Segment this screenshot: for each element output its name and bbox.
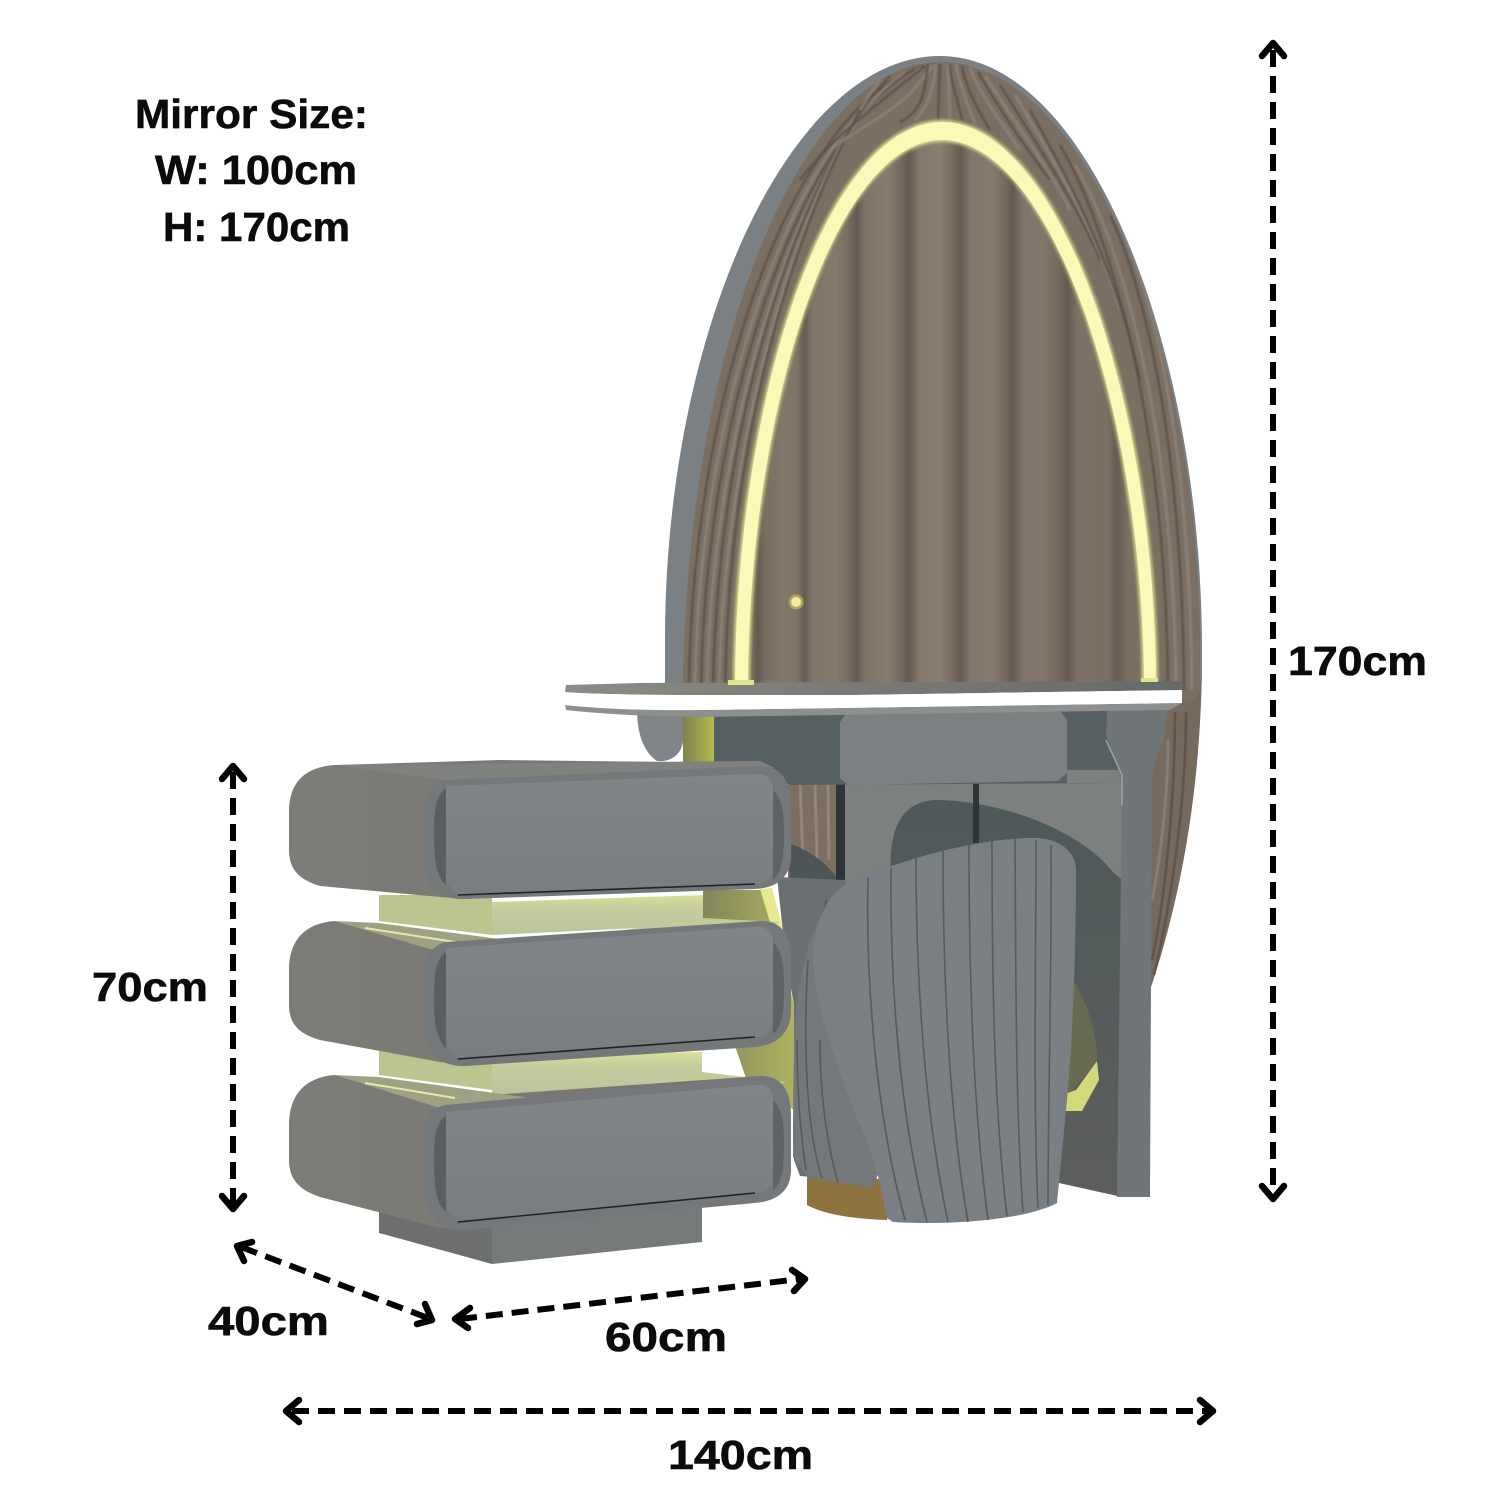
chair cast shadow and lower panel xyxy=(891,800,1122,1197)
right leg xyxy=(1106,708,1167,1197)
chair pleats xyxy=(868,839,1051,1222)
table underside xyxy=(565,703,1182,717)
curtain reflection xyxy=(683,62,1200,708)
plinth xyxy=(379,1200,702,1264)
chair xyxy=(793,838,1076,1223)
shadow beside drawer xyxy=(788,843,842,885)
nightstand xyxy=(289,760,791,1264)
mirror size text: Mirror Size: xyxy=(135,91,368,137)
rear shell pleats xyxy=(797,900,850,1183)
arrow: depth 40cm xyxy=(237,1242,432,1324)
mirror size text xyxy=(135,91,368,250)
gold base xyxy=(807,1172,890,1220)
arrow: nightstand height 70cm xyxy=(222,766,244,1209)
mirror size text: W: 100cm xyxy=(155,147,357,193)
green curtain and ring behind the drawers xyxy=(703,890,795,1110)
arrow: total height 170cm xyxy=(1262,43,1284,1199)
glowing ring section lower right xyxy=(1062,1061,1099,1111)
touch switch xyxy=(788,594,804,610)
glowing table edge xyxy=(564,690,1182,710)
label: 40cm: 40cm xyxy=(208,1298,329,1344)
table top surface xyxy=(565,681,1182,695)
chair rear shell xyxy=(793,885,890,1188)
back panel xyxy=(841,770,1122,900)
drawer 1 xyxy=(289,760,791,899)
curtain below table xyxy=(788,780,846,880)
drawer 2 xyxy=(289,921,791,1066)
panel behind chair xyxy=(703,770,1122,1197)
label: 70cm: 70cm xyxy=(92,964,208,1010)
lighter wall under the apron's right end xyxy=(1067,770,1122,783)
table drawer xyxy=(840,711,1067,785)
apron xyxy=(714,708,1122,785)
label: 140cm: 140cm xyxy=(668,1432,813,1478)
table left support xyxy=(637,712,683,761)
lower right curtain drape beside the table leg xyxy=(1150,650,1202,990)
illuminated LED ring xyxy=(733,120,1158,690)
mirror size text: H: 170cm xyxy=(163,204,350,250)
dressing table xyxy=(564,678,1182,1197)
olive reflection right of chair xyxy=(1068,984,1097,1096)
glow block upper xyxy=(379,895,780,940)
glow block lower xyxy=(379,1050,786,1100)
green gap xyxy=(683,714,714,764)
arrow: nightstand width 60cm xyxy=(455,1270,805,1328)
drawer 3 xyxy=(289,1075,791,1230)
mirror frame rim xyxy=(665,56,1202,990)
label: 170cm: 170cm xyxy=(1288,638,1427,684)
label: 60cm: 60cm xyxy=(605,1314,727,1360)
arrow: total width 140cm xyxy=(286,1400,1213,1422)
dark support post xyxy=(836,783,845,883)
mirror xyxy=(665,50,1210,1000)
chair front back-rest xyxy=(813,838,1076,1223)
ring light reflection on table xyxy=(728,678,1158,685)
grey panel between drawers and chair xyxy=(777,877,846,1180)
